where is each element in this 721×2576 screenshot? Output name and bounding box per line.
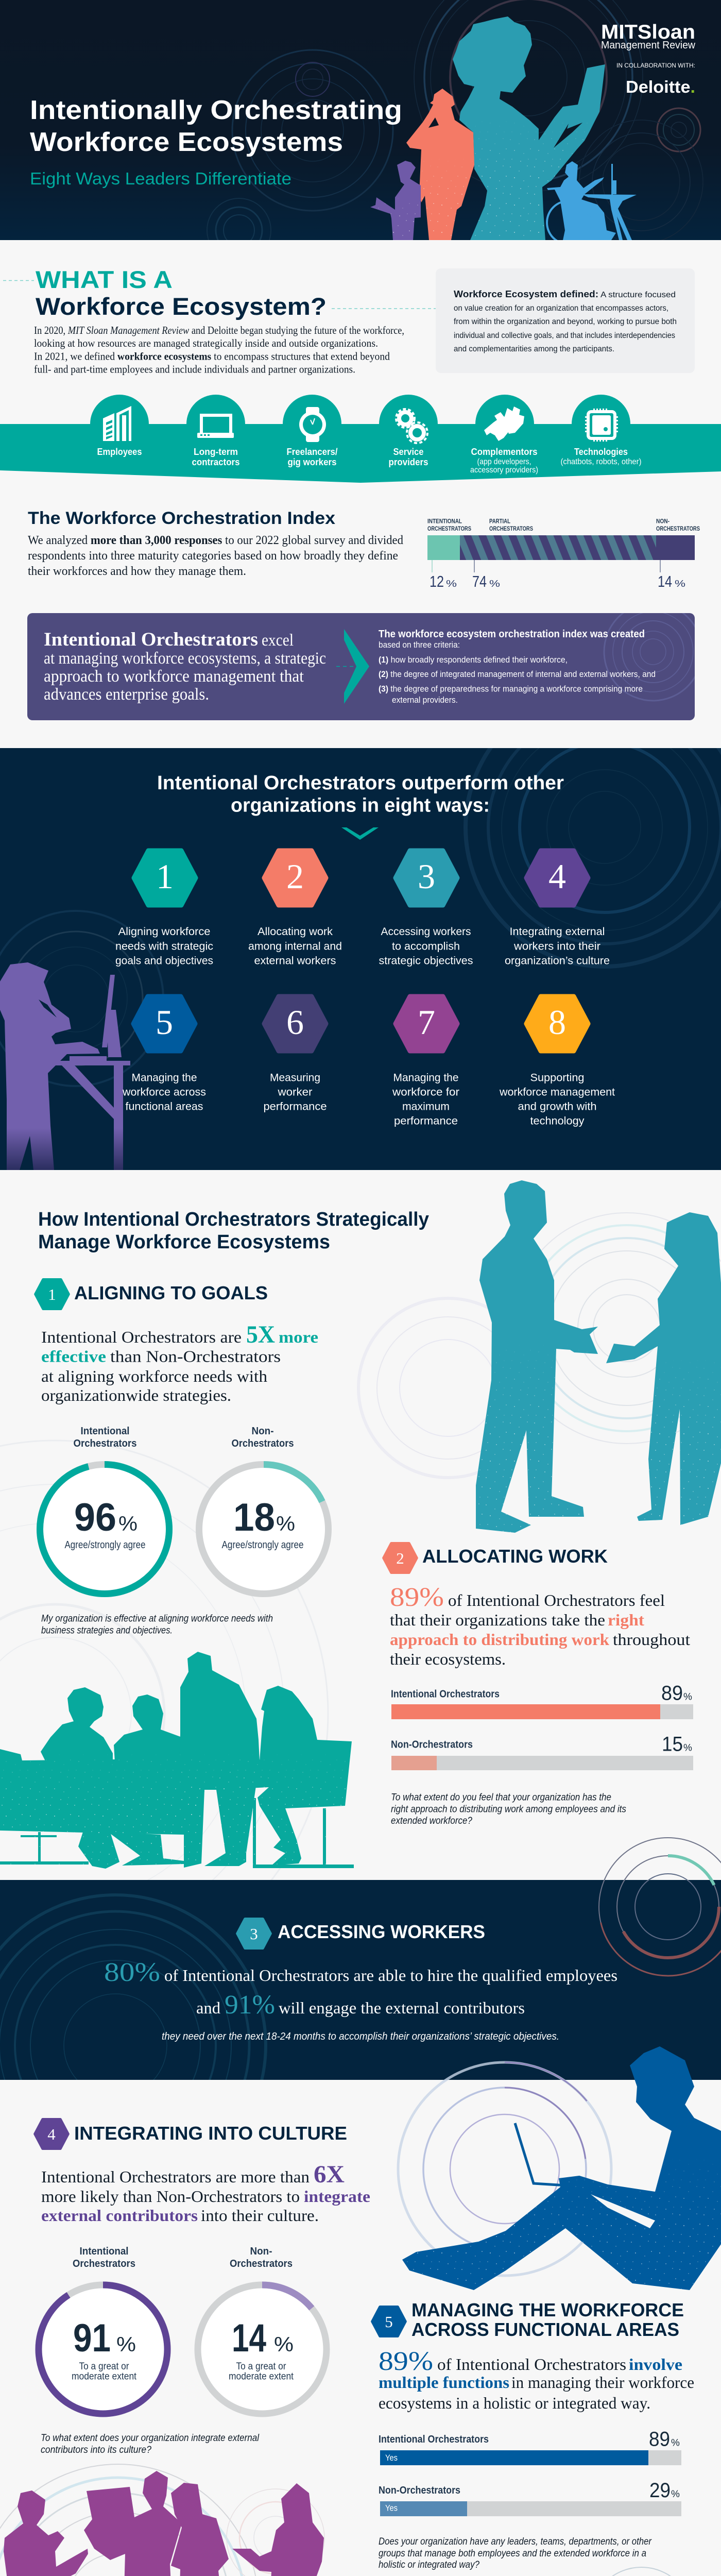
badge <box>384 1543 417 1573</box>
bar chart: 29 <box>649 2479 671 2502</box>
labels: Employees <box>97 447 142 457</box>
statement: effective <box>41 1347 106 1365</box>
way 6: worker <box>277 1086 313 1098</box>
statement: 80% <box>104 1958 160 1987</box>
labels: Technologies <box>574 447 628 457</box>
donut: intentional 91%: moderate extent <box>72 2371 137 2382</box>
statement: Intentional Orchestrators are more than <box>41 2167 310 2186</box>
donut: non-orchestrators 14%: 14 <box>232 2316 266 2360</box>
way 5: Managing the <box>132 1072 197 1084</box>
donut: non-orchestrators 18%: 18 <box>233 1496 275 1539</box>
statement: at managing workforce ecosystems, a strategic <box>44 649 326 668</box>
labels: Service <box>393 447 423 457</box>
title: Workforce Ecosystems <box>30 127 343 157</box>
way 1 <box>115 851 213 967</box>
labels <box>97 447 642 474</box>
statement: and <box>196 1998 220 2017</box>
way 8: Supporting <box>530 1072 584 1084</box>
donut: non-orchestrators 18%: Agree/strongly agree <box>221 1539 304 1551</box>
heading: Intentional Orchestrators outperform other <box>157 772 564 794</box>
statement <box>379 2347 694 2412</box>
figure: woman with tablet <box>453 16 605 240</box>
way 5: workforce across <box>122 1086 206 1098</box>
way 1: goals and objectives <box>115 955 213 967</box>
badge <box>372 2307 405 2336</box>
step heading: INTEGRATING INTO CULTURE <box>74 2123 347 2144</box>
donut: intentional 96%: Agree/strongly agree <box>65 1539 145 1551</box>
survey caption <box>41 2433 260 2455</box>
statement: 6X <box>314 2161 345 2188</box>
criteria: based on three criteria: <box>379 640 460 650</box>
way 7: workforce for <box>392 1086 459 1098</box>
bar chart: 15 <box>662 1733 683 1756</box>
statement: right <box>608 1611 644 1629</box>
statement: into their culture. <box>201 2206 319 2225</box>
survey caption <box>391 1792 626 1826</box>
badge: 1 <box>48 1285 56 1303</box>
step 3 header <box>237 1919 485 1948</box>
heading: WHAT IS A <box>36 266 173 293</box>
figure: seated worker with laptop <box>402 2046 721 2290</box>
survey caption: contributors into its culture? <box>41 2445 151 2455</box>
statement: ecosystems in a holistic or integrated way. <box>379 2394 650 2412</box>
way 7: Managing the <box>393 1072 458 1084</box>
statement: multiple functions <box>379 2373 509 2392</box>
way 1: Aligning workforce <box>118 926 210 938</box>
statement: more <box>279 1328 318 1346</box>
statement: excel <box>262 631 294 650</box>
rings behind group <box>0 2464 324 2576</box>
description <box>28 534 403 578</box>
statement: of Intentional Orchestrators are able to hire the qualified employees <box>164 1966 617 1985</box>
way 5: functional areas <box>126 1100 203 1113</box>
heading: Manage Workforce Ecosystems <box>38 1231 330 1253</box>
heading <box>157 772 564 816</box>
way 7: 7 <box>418 1003 435 1042</box>
way 2 <box>248 851 342 967</box>
footnote: they need over the next 18-24 months to accomplish their organizations’ strategic objectives. <box>162 2031 559 2042</box>
figure: person with folder <box>370 161 421 240</box>
way 7: performance <box>394 1115 458 1127</box>
way 4: 4 <box>548 857 566 896</box>
bar chart: 89 <box>661 1682 683 1704</box>
labels: (chatbots, robots, other) <box>560 457 642 466</box>
subtitle: Eight Ways Leaders Differentiate <box>30 169 291 188</box>
bar chart: Yes <box>385 2503 398 2513</box>
way 6: performance <box>264 1100 327 1113</box>
step heading: ACROSS FUNCTIONAL AREAS <box>411 2319 679 2340</box>
statement <box>390 1583 690 1668</box>
section: how orchestrators manage ecosystems <box>0 1180 721 1880</box>
chart: segmented maturity bar: 14 <box>658 572 672 590</box>
statement: throughout <box>613 1630 690 1649</box>
donut: intentional 91%: To a great or <box>79 2361 129 2372</box>
arrow: chevron <box>344 629 369 704</box>
intro text: looking at how resources are managed strategically inside and outside organizations. <box>34 337 378 349</box>
step 3 header: ACCESSING WORKERS <box>278 1921 485 1942</box>
survey caption: business strategies and objectives. <box>41 1625 173 1636</box>
chart: segmented maturity bar: NON- <box>656 517 670 524</box>
description: We analyzed more than 3,000 responses to our 2022 global survey and divided <box>28 534 403 547</box>
statement: at aligning workforce needs with <box>41 1367 267 1385</box>
survey caption: To what extent does your organization integrate external <box>41 2433 260 2444</box>
step heading: ALLOCATING WORK <box>422 1546 608 1567</box>
panel: definition: Workforce Ecosystem defined: A structure focused <box>454 289 676 299</box>
intro text: In 2020, MIT Sloan Management Review and Deloitte began studying the future of the workforce, <box>34 324 404 336</box>
intro text: full- and part-time employees and include individuals and partner organizations. <box>34 363 355 375</box>
labels: providers <box>388 457 428 467</box>
way 3: to accomplish <box>392 941 460 952</box>
heading <box>36 266 327 320</box>
step 1: aligning to goals <box>36 1279 329 1636</box>
bar chart: % <box>671 2438 680 2448</box>
panel: definition: on value creation for an organization that encompasses actors, <box>454 304 668 313</box>
bar chart: Non-Orchestrators <box>379 2485 460 2496</box>
title <box>30 95 402 157</box>
way 5: 5 <box>156 1003 173 1042</box>
badge: 4 <box>47 2125 56 2143</box>
statement: integrate <box>304 2187 370 2206</box>
statement: of Intentional Orchestrators <box>437 2355 626 2374</box>
way 8 <box>499 996 615 1127</box>
heading: How Intentional Orchestrators Strategically <box>38 1209 429 1230</box>
statement: organizationwide strategies. <box>41 1386 231 1404</box>
chart: segmented maturity bar: % <box>675 579 685 589</box>
way 6: Measuring <box>270 1072 320 1084</box>
statement: in managing their workforce <box>511 2373 694 2392</box>
heading: The Workforce Orchestration Index <box>28 509 335 528</box>
statement: than Non-Orchestrators <box>110 1347 281 1365</box>
badge <box>36 1279 68 1309</box>
chart: segmented maturity bar: 74 <box>472 572 487 590</box>
figure: person in wheelchair at desk <box>547 161 637 244</box>
section: what is a workforce ecosystem <box>3 266 695 375</box>
statement: 91% <box>225 1990 275 2020</box>
description: respondents into three maturity categories based on how broadly they define <box>28 549 398 563</box>
chart: segmented maturity bar: PARTIAL <box>489 517 510 524</box>
labels: accessory providers) <box>470 466 538 474</box>
donut: intentional 91%: 91 <box>73 2316 111 2360</box>
criteria: (3) the degree of preparedness for managing a workforce comprising more <box>379 684 643 693</box>
donut: non-orchestrators 14%: To a great or <box>236 2361 286 2372</box>
bar chart: % <box>671 2489 680 2500</box>
icon: chip <box>585 409 618 442</box>
criteria: (2) the degree of integrated management of internal and external workers, and <box>379 670 656 679</box>
step 4: integrating into culture <box>35 2119 370 2455</box>
bar chart: % <box>683 1742 692 1754</box>
figure: team around table <box>0 1652 354 1869</box>
statement: Intentional Orchestrators <box>44 629 258 650</box>
section: workforce orchestration index <box>28 509 700 590</box>
survey caption: right approach to distributing work among employees and its <box>391 1804 626 1815</box>
panel: definition <box>436 268 695 373</box>
statement: approach to distributing work <box>390 1630 609 1649</box>
way 8: and growth with <box>518 1100 596 1113</box>
way 3: strategic objectives <box>379 955 473 967</box>
donut: intentional 96%: % <box>118 1513 138 1535</box>
rings behind laptop worker <box>398 2062 611 2276</box>
donut: non-orchestrators 14%: Orchestrators <box>230 2258 293 2269</box>
labels: Complementors <box>471 447 538 457</box>
way 3: 3 <box>418 857 435 896</box>
hexagon grid: eight ways <box>115 851 615 1127</box>
donut: non-orchestrators 18% <box>199 1426 329 1594</box>
survey caption: holistic or integrated way? <box>379 2560 479 2570</box>
donut: non-orchestrators 14%: % <box>274 2333 294 2356</box>
way 8: technology <box>530 1115 585 1127</box>
icon: laptop <box>197 415 234 438</box>
badge: 2 <box>396 1549 404 1567</box>
figure: woman at standing desk <box>0 962 130 1170</box>
rings: top right <box>574 1812 721 2001</box>
statement: will engage the external contributors <box>279 1998 525 2017</box>
donut: non-orchestrators 18%: Orchestrators <box>232 1438 294 1449</box>
title: Intentionally Orchestrating <box>30 95 402 125</box>
way 1: 1 <box>156 857 174 896</box>
icon: gears <box>396 409 427 443</box>
figure: person in hard hat <box>406 89 474 240</box>
statement <box>44 629 326 704</box>
donut: intentional 96%: Orchestrators <box>73 1438 137 1449</box>
way 7 <box>392 996 459 1127</box>
step heading <box>411 2299 684 2340</box>
statement: advances enterprise goals. <box>44 685 209 704</box>
way 4: Integrating external <box>510 926 605 938</box>
section: performance <box>0 2464 721 2576</box>
labels: Freelancers/ <box>286 447 338 457</box>
badge: 5 <box>385 2313 393 2331</box>
donut: non-orchestrators 18%: % <box>276 1513 295 1535</box>
step 2: allocating work <box>384 1543 693 1826</box>
way 3: Accessing workers <box>381 926 471 938</box>
statement: their ecosystems. <box>390 1650 506 1668</box>
bar chart: Non-Orchestrators <box>391 1739 473 1751</box>
way 3 <box>379 851 473 967</box>
statement <box>41 1321 318 1404</box>
chart: segmented maturity bar: ORCHESTRATORS <box>656 525 700 532</box>
step heading: MANAGING THE WORKFORCE <box>411 2299 684 2320</box>
statement: 5X <box>246 1321 275 1348</box>
donut: intentional 96% <box>40 1426 169 1594</box>
section: eight ways <box>0 748 721 1170</box>
panel: definition: and complementarities among the participants. <box>454 345 614 353</box>
way 8: 8 <box>548 1003 566 1042</box>
panel: definition: individual and collective goals, and that includes interdependencies <box>454 331 675 340</box>
survey caption: groups that manage both employees and the extended workforce in a <box>379 2548 646 2559</box>
section: accessing workers <box>0 1812 721 2196</box>
chart: segmented maturity bar: ORCHESTRATORS <box>427 525 471 532</box>
donut: intentional 91%: % <box>116 2333 136 2356</box>
teal band: workforce types <box>0 395 721 483</box>
labels: (app developers, <box>477 457 531 466</box>
criteria: (1) how broadly respondents defined their workforce, <box>379 655 568 665</box>
donut: intentional 91% <box>39 2246 167 2414</box>
bar chart: Intentional Orchestrators <box>379 2434 489 2445</box>
way 2: 2 <box>286 857 304 896</box>
survey caption: extended workforce? <box>391 1816 472 1826</box>
survey caption: Does your organization have any leaders, teams, departments, or other <box>379 2536 652 2547</box>
logos: MIT Sloan and Deloitte: Management Review <box>601 40 696 51</box>
description: their workforces and how they manage them. <box>28 565 246 578</box>
logos: MIT Sloan and Deloitte: Deloitte. <box>626 77 695 96</box>
way 4: workers into their <box>513 941 600 952</box>
donut: non-orchestrators 14%: moderate extent <box>229 2371 294 2382</box>
donut: non-orchestrators 18%: Non- <box>251 1426 274 1437</box>
survey caption <box>379 2536 652 2570</box>
statement: approach to workforce management that <box>44 667 304 686</box>
figure: group with clipboards <box>0 2471 324 2576</box>
way 2: external workers <box>254 955 336 967</box>
panel: intentional orchestrators <box>27 603 702 720</box>
statement: of Intentional Orchestrators feel <box>448 1591 665 1609</box>
way 8: workforce management <box>499 1086 615 1098</box>
chart: segmented maturity bar: % <box>446 579 457 589</box>
icon: watch <box>299 407 326 442</box>
bar chart <box>391 1682 693 1770</box>
donut: intentional 91%: Orchestrators <box>73 2258 135 2269</box>
way 5 <box>122 996 206 1113</box>
criteria: The workforce ecosystem orchestration index was created <box>379 629 645 640</box>
statement: external contributors <box>41 2206 198 2225</box>
labels: contractors <box>192 457 240 467</box>
criteria: external providers. <box>392 696 458 705</box>
step 5: managing across functional areas <box>372 2299 694 2570</box>
way 2: among internal and <box>248 941 342 952</box>
way 1: needs with strategic <box>115 941 213 952</box>
hero banner <box>0 0 721 262</box>
bar chart <box>379 2428 681 2516</box>
statement: that their organizations take the <box>390 1611 605 1629</box>
way 6 <box>264 996 327 1113</box>
step heading: ALIGNING TO GOALS <box>74 1282 268 1303</box>
rings: upper right <box>590 2567 693 2576</box>
donut: non-orchestrators 14%: Non- <box>250 2246 272 2257</box>
way 2: Allocating work <box>258 926 333 938</box>
chart: segmented maturity bar: INTENTIONAL <box>427 517 462 524</box>
icon: down chevron <box>341 827 379 840</box>
donut: intentional 91%: Intentional <box>79 2246 129 2257</box>
donut: intentional 96%: 96 <box>74 1496 116 1539</box>
chart: segmented maturity bar: 12 <box>430 572 444 590</box>
bar chart: Intentional Orchestrators <box>391 1689 500 1700</box>
chart: segmented maturity bar <box>427 517 700 590</box>
statement: 89% <box>390 1583 444 1612</box>
bar chart: % <box>683 1692 692 1702</box>
logos: MIT Sloan and Deloitte <box>601 21 696 96</box>
bar chart: Yes <box>385 2453 398 2463</box>
statement: 89% <box>379 2347 433 2376</box>
bar chart: 89 <box>649 2428 670 2450</box>
statement <box>104 1958 617 2020</box>
labels: Long-term <box>194 447 238 457</box>
figure: handshake couple <box>476 1180 721 1533</box>
way 6: 6 <box>286 1003 304 1042</box>
way 7: maximum <box>402 1100 450 1113</box>
icon: puzzle pieces <box>484 406 524 441</box>
intro text <box>34 324 404 375</box>
statement: involve <box>629 2355 682 2374</box>
criteria <box>379 629 656 705</box>
step 3 header: 3 <box>250 1925 258 1943</box>
heading: organizations in eight ways: <box>231 794 490 816</box>
heading: Workforce Ecosystem? <box>36 293 327 320</box>
survey caption: My organization is effective at aligning workforce needs with <box>41 1614 273 1624</box>
heading <box>38 1209 429 1253</box>
panel: definition: from within the organization and beyond, working to pursue both <box>454 317 677 326</box>
statement: more likely than Non-Orchestrators to <box>41 2187 300 2206</box>
logos: MIT Sloan and Deloitte: IN COLLABORATION WITH: <box>616 63 695 69</box>
statement <box>41 2161 370 2225</box>
way 4: organization’s culture <box>505 955 610 967</box>
logos: MIT Sloan and Deloitte: MITSloan <box>601 21 695 43</box>
chart: segmented maturity bar: % <box>489 579 500 589</box>
survey caption <box>41 1614 273 1636</box>
labels: gig workers <box>287 457 337 467</box>
chart: segmented maturity bar: ORCHESTRATORS <box>489 525 533 532</box>
donut: non-orchestrators 14% <box>198 2246 327 2414</box>
donut: intentional 96%: Intentional <box>80 1426 130 1437</box>
section: integrating into culture and functional areas <box>35 2046 721 2570</box>
survey caption: To what extent do you feel that your organization has the <box>391 1792 611 1803</box>
badge <box>35 2119 68 2149</box>
intro text: In 2021, we defined workforce ecosystems to encompass structures that extend beyond <box>34 350 390 363</box>
statement: Intentional Orchestrators are <box>41 1328 242 1346</box>
icon: building <box>103 406 131 441</box>
way 4 <box>505 851 610 967</box>
